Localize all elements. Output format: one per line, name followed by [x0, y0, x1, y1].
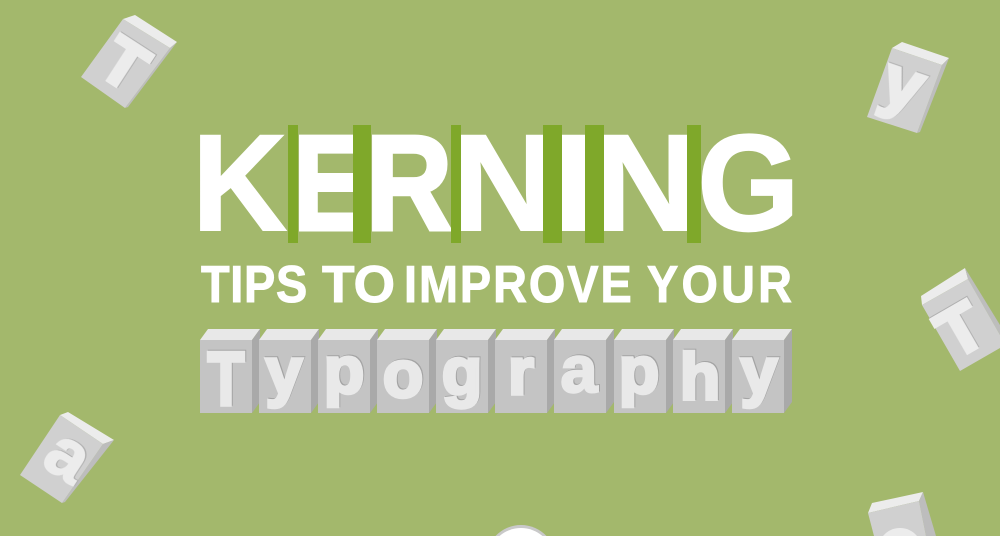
block: T: T	[208, 337, 244, 422]
block: a: a	[561, 332, 599, 406]
subtitle: TIPS TO IMPROVE YOUR: YOUR	[647, 256, 792, 314]
title letters: N	[594, 106, 697, 259]
kerning spacing bars	[288, 125, 701, 243]
block: p: p	[324, 333, 364, 407]
letterpress blocks spelling Typography	[200, 329, 792, 422]
block: h	[673, 329, 733, 414]
floating block: a lower left: a	[32, 412, 108, 499]
floating block: T top left: T	[87, 22, 162, 106]
block: r: r	[508, 334, 534, 408]
subtitle: TIPS TO IMPROVE YOUR	[201, 256, 792, 314]
title letters: E	[293, 107, 365, 258]
block: g	[436, 329, 496, 413]
block: p	[318, 329, 378, 413]
block: o	[377, 329, 437, 413]
block: a	[554, 329, 614, 413]
title letters: N	[453, 107, 555, 260]
block: y: y	[266, 334, 303, 408]
title letters: I	[553, 107, 594, 260]
subtitle: TIPS TO IMPROVE YOUR: TO	[322, 256, 395, 314]
block: g: g	[442, 334, 482, 408]
title letters: R	[366, 108, 452, 259]
floating block: cropped block bottom right	[868, 492, 936, 536]
cropped letter at bottom centre	[496, 525, 546, 536]
block: y: y	[741, 334, 778, 408]
title letters	[192, 106, 799, 260]
title letters: G	[697, 107, 799, 260]
floating block: y top right: y	[873, 40, 935, 127]
floating block: T top left	[81, 15, 177, 108]
block: y	[732, 329, 792, 413]
block: y	[259, 329, 319, 413]
block: p: p	[619, 333, 659, 407]
block: h: h	[680, 340, 720, 414]
subtitle: TIPS TO IMPROVE YOUR: TIPS	[201, 256, 307, 314]
block: o: o	[383, 337, 423, 411]
block: r	[495, 329, 555, 413]
title: KERNING with spacing bars	[192, 106, 799, 260]
subtitle: TIPS TO IMPROVE YOUR: IMPROVE	[404, 256, 632, 314]
block: p	[614, 329, 674, 413]
floating block: T right edge: T	[924, 287, 997, 373]
title letters: K	[192, 107, 287, 260]
